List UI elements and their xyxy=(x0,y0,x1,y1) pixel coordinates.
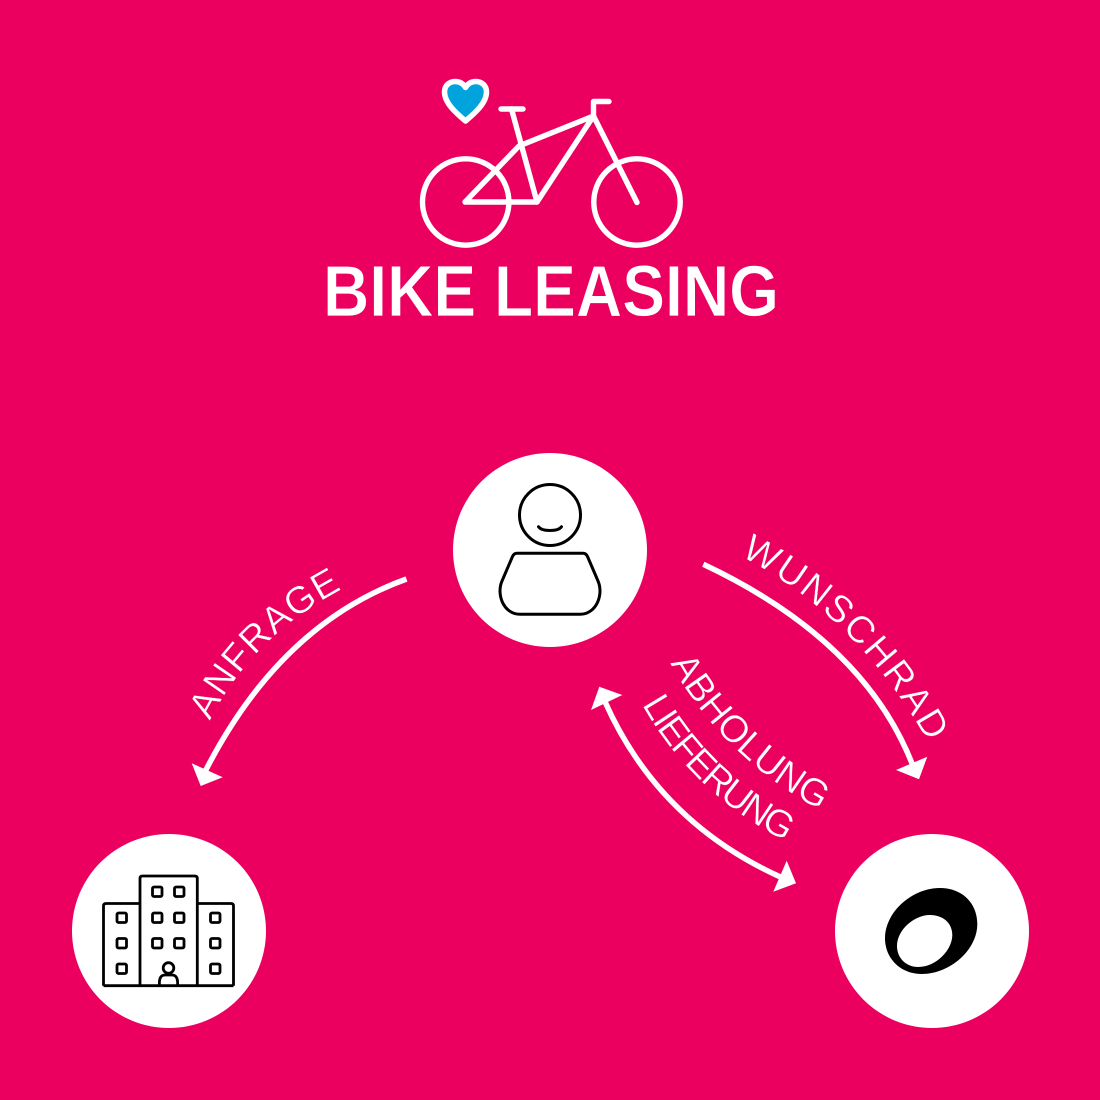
label: Abholung: ABHOLUNG xyxy=(670,659,828,806)
arrow: employee to dealer xyxy=(703,564,927,779)
icon: person xyxy=(500,484,600,614)
node: employee xyxy=(453,453,647,647)
arrow: dealer and employee two-way xyxy=(591,687,796,892)
icon: bicycle with heart xyxy=(422,82,680,245)
label: Anfrage: ANFRAGE xyxy=(192,568,341,721)
arrow: employee to company xyxy=(192,579,406,786)
title: BIKE LEASING xyxy=(323,252,779,332)
label: Lieferung: LIEFERUNG xyxy=(643,694,793,838)
node: company xyxy=(72,834,266,1028)
icon: dealer logo xyxy=(885,888,977,974)
icon: office building xyxy=(104,876,234,986)
label: Wunschrad: WUNSCHRAD xyxy=(747,533,946,736)
node: bike dealer xyxy=(835,834,1029,1028)
icon: heart xyxy=(444,82,486,121)
bicycle xyxy=(422,102,680,245)
